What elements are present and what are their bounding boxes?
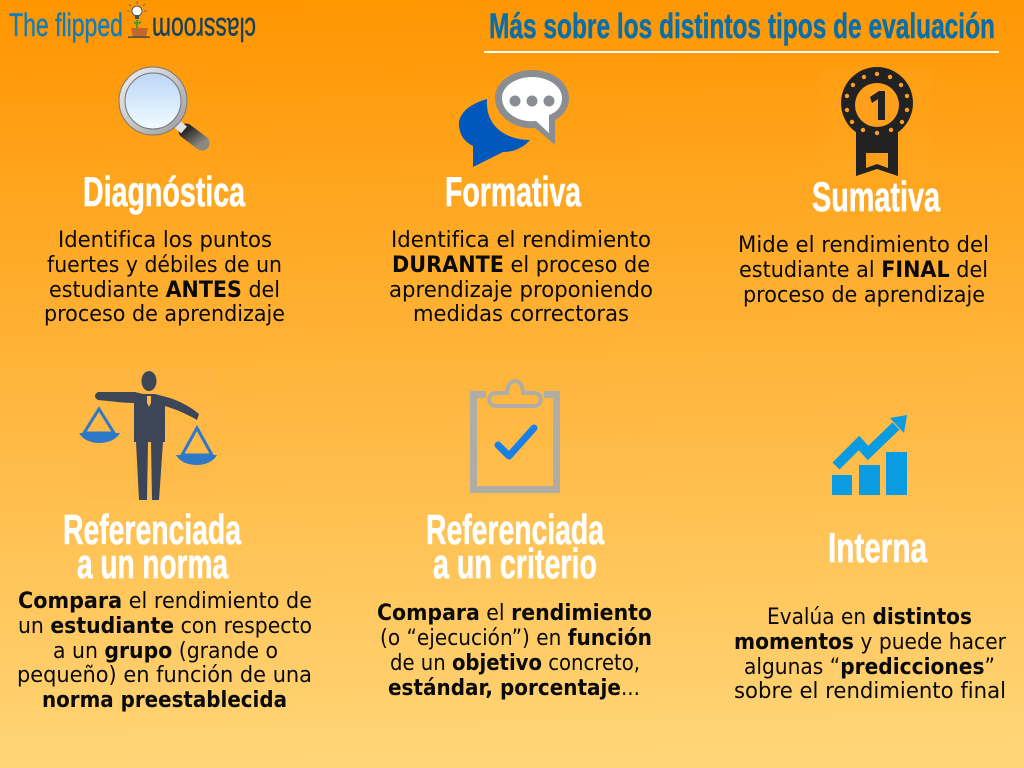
text: diagnóstica description — [44, 228, 285, 327]
panel: referenciada a un criterio — [377, 381, 652, 701]
text: formativa description: medidas correctoras — [413, 302, 629, 327]
icon: chat bubbles — [459, 70, 569, 167]
heading: Sumativa: Sumativa — [812, 173, 940, 220]
icon: growth chart — [832, 415, 907, 495]
text: norma description: pequeño) en función de una — [17, 663, 312, 688]
text: interna description: sobre el rendimiento final — [734, 679, 1006, 704]
text: diagnóstica description: estudiante ANTES del — [49, 278, 280, 303]
text: sumativa description — [738, 233, 989, 308]
text: criterio description — [377, 601, 652, 701]
logo: The flipped classroom — [9, 1, 256, 48]
heading: Referenciada a un norma — [63, 506, 241, 587]
text: interna description — [734, 605, 1007, 704]
text: criterio description: estándar, porcentaje... — [388, 676, 640, 701]
text: sumativa description: estudiante al FINAL del — [739, 258, 988, 283]
heading: Formativa: Formativa — [445, 168, 581, 215]
heading: Referenciada a un criterio: a un criterio — [433, 540, 597, 587]
heading: Diagnóstica: Diagnóstica — [83, 168, 245, 215]
text: norma description: Compara el rendimiento de — [18, 589, 312, 614]
text: formativa description: aprendizaje proponiendo — [389, 278, 653, 303]
panel: diagnóstica — [44, 67, 285, 327]
heading: Referenciada a un norma: Referenciada — [63, 506, 241, 553]
text: formativa description — [389, 228, 653, 327]
text: formativa description: Identifica el rendimiento — [391, 228, 651, 253]
heading: Referenciada a un criterio — [426, 506, 604, 587]
text: sumativa description: Mide el rendimiento del — [738, 233, 989, 258]
icon: clipboard with check — [474, 381, 556, 490]
text: diagnóstica description: fuertes y débiles de un — [47, 253, 282, 278]
text: norma description: norma preestablecida — [42, 688, 287, 713]
text: sumativa description: proceso de aprendizaje — [743, 283, 985, 308]
text: diagnóstica description: proceso de aprendizaje — [44, 302, 285, 327]
text: norma description: un estudiante con respecto — [18, 614, 312, 639]
text: formativa description: DURANTE el proceso de — [392, 253, 650, 278]
heading: Interna: Interna — [828, 524, 927, 571]
text: criterio description: (o “ejecución”) en función — [380, 626, 652, 651]
icon: man with scales — [79, 368, 217, 500]
panel: interna — [734, 415, 1007, 704]
text: interna description: momentos y puede hacer — [734, 630, 1007, 655]
text: interna description: algunas “predicciones” — [744, 655, 995, 680]
text: criterio description: Compara el rendimiento — [377, 601, 652, 626]
text: interna description: Evalúa en distintos — [767, 605, 972, 630]
logo: The flipped classroom: classroom — [152, 11, 256, 48]
panel: formativa — [389, 70, 653, 327]
text: criterio description: de un objetivo concreto, — [390, 651, 640, 676]
panel: referenciada a una norma — [17, 368, 312, 713]
heading: Referenciada a un criterio: Referenciada — [426, 506, 604, 553]
icon: magnifying glass — [119, 67, 202, 143]
text: norma description: a un grupo (grande o — [53, 639, 278, 664]
panel: sumativa — [738, 67, 989, 308]
heading: Referenciada a un norma: a un norma — [77, 540, 228, 587]
text: diagnóstica description: Identifica los puntos — [58, 228, 272, 253]
icon: medal — [822, 67, 932, 178]
logo: The flipped classroom: The flipped — [9, 7, 123, 43]
text: norma description — [17, 589, 312, 713]
